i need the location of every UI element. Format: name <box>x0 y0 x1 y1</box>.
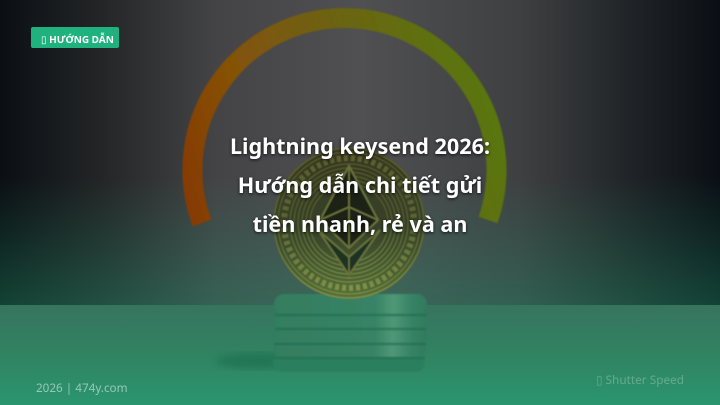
title <box>230 132 490 239</box>
category badge <box>31 27 119 48</box>
year and site label: 2026 | 474y.com <box>36 380 128 396</box>
category badge: ▯ HƯỚNG DẪN <box>41 32 114 46</box>
title: Lightning keysend 2026: <box>230 132 490 161</box>
gauge arc <box>192 18 496 223</box>
photo credit: ▯ Shutter Speed <box>596 372 684 388</box>
ethereum coin <box>273 147 425 299</box>
coin stack shadow <box>216 353 300 369</box>
ethereum diamond <box>320 166 378 248</box>
title: tiền nhanh, rẻ và an <box>253 210 467 239</box>
title: Hướng dẫn chi tiết gửi <box>238 171 482 200</box>
coin stack <box>273 294 427 372</box>
